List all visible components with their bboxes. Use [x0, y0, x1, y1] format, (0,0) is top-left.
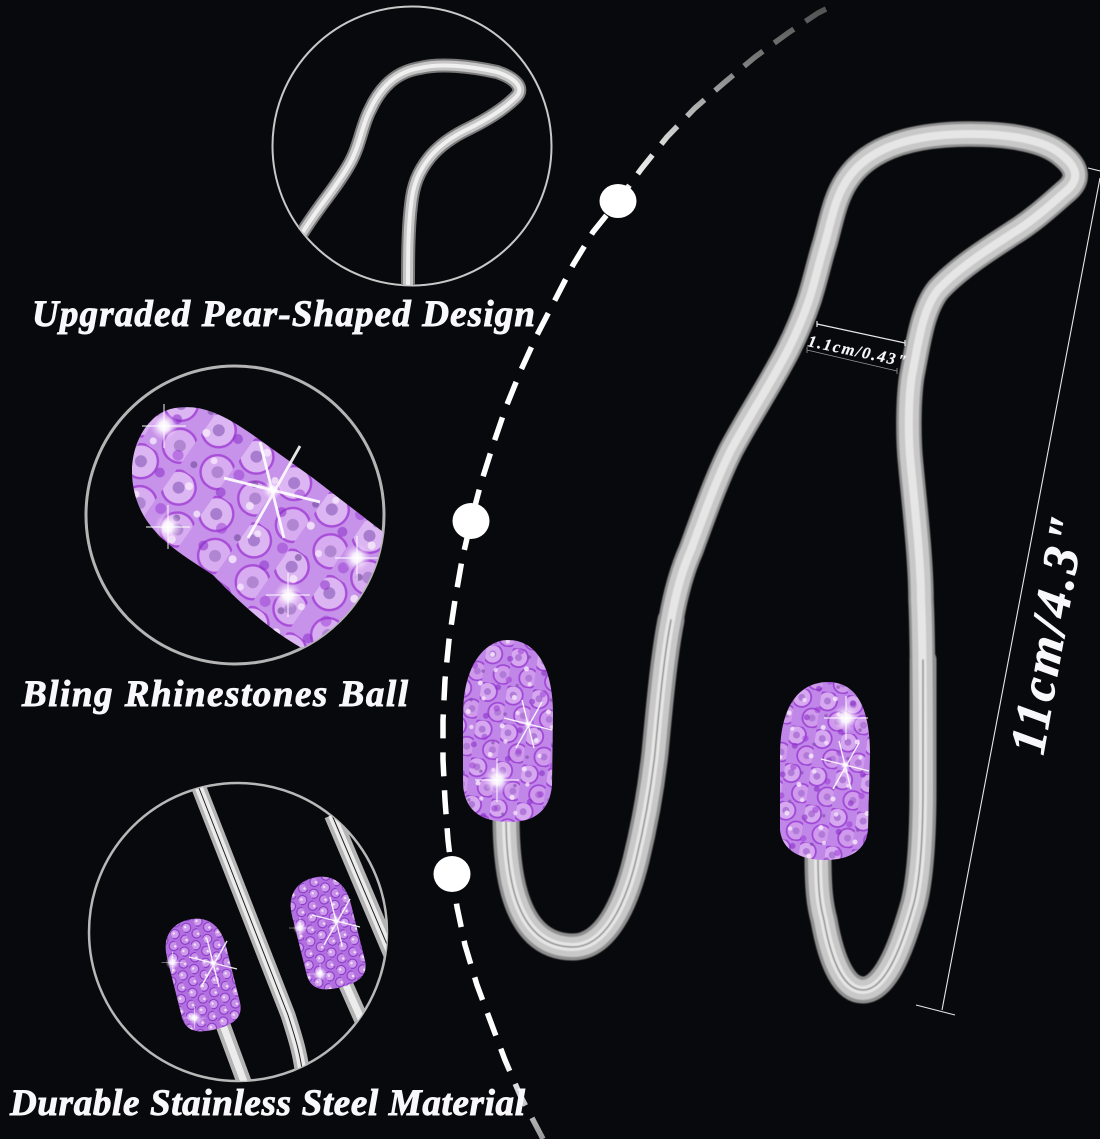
heading: rhinestones ball: Bling Rhinestones Ball: [21, 674, 409, 715]
detail circle: rhinestones close-up: [86, 366, 400, 664]
heading: stainless steel material: Durable Stainless Steel Material: [9, 1083, 526, 1124]
detail circle: pear-shaped wire: [272, 6, 552, 290]
dashed arc divider with three marker dots: [434, 9, 826, 1139]
heading: pear-shaped design: Upgraded Pear-Shaped Design: [32, 294, 535, 335]
main hook wire: [506, 134, 1075, 990]
width dimension: 1.1cm/0.43: 1.1cm/0.43": [806, 331, 908, 371]
height dimension line: [916, 168, 1100, 1015]
height dimension label: 11cm/4.3: 11cm/4.3": [999, 512, 1096, 758]
right rhinestone ball: [780, 682, 870, 860]
detail circle: stainless steel material: [89, 783, 400, 1090]
left rhinestone ball: [463, 640, 553, 822]
